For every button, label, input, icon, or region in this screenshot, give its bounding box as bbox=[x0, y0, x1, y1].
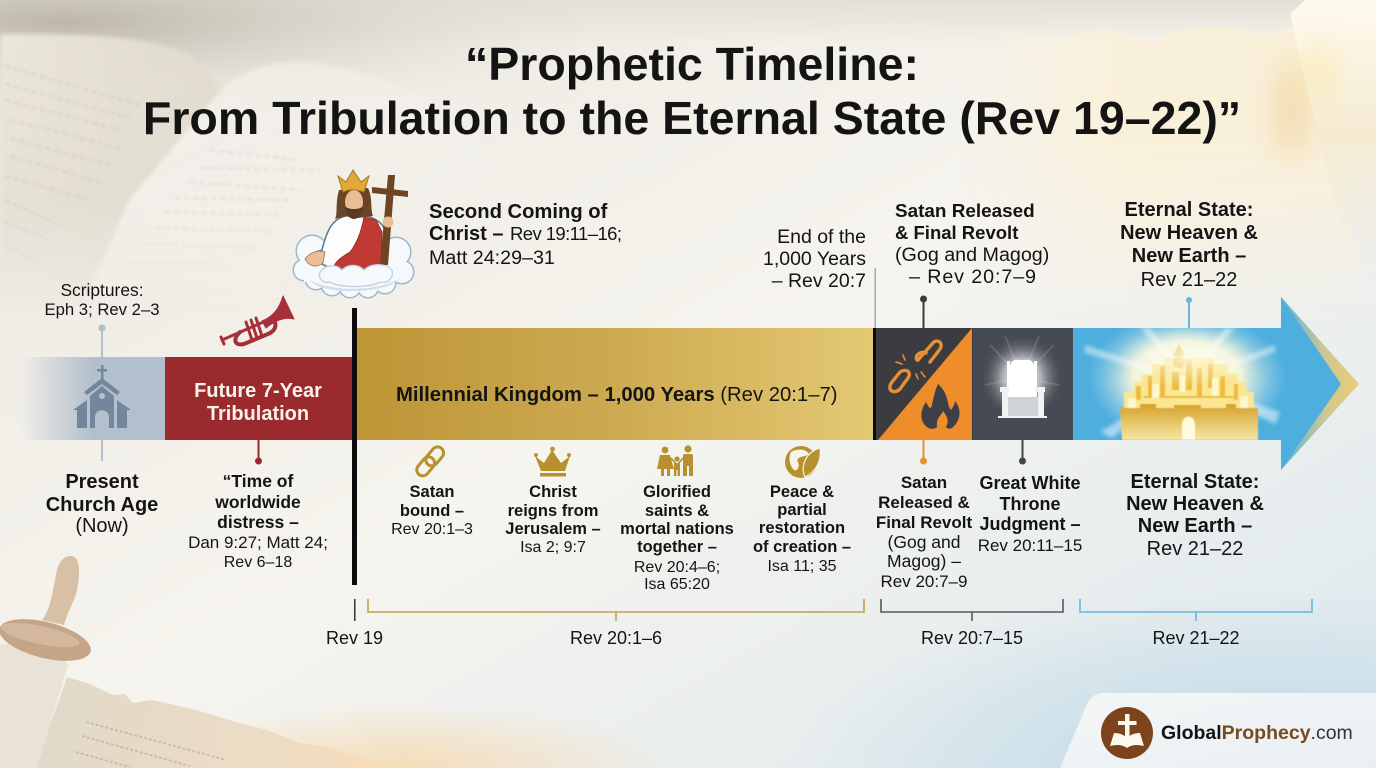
icon: golden city bbox=[1117, 328, 1258, 440]
label: Satan released bottom: Rev 20:7–9 bbox=[881, 572, 967, 591]
icon: Christ on a cloud bbox=[294, 170, 413, 297]
item: glorified saints: together – bbox=[637, 538, 717, 556]
connector: Satan released bottom bbox=[920, 440, 927, 464]
cross bbox=[380, 175, 395, 265]
label: present church age bbox=[46, 471, 158, 537]
item: glorified saints: Isa 65:20 bbox=[644, 576, 710, 593]
label: great white throne: Rev 20:11–15 bbox=[978, 536, 1082, 555]
item: Satan bound: bound – bbox=[400, 502, 464, 520]
label: Satan released bottom: Satan bbox=[901, 473, 947, 492]
label: Satan released bottom: Final Revolt bbox=[876, 513, 973, 532]
connector: church top bbox=[98, 324, 106, 357]
label: eternal state bottom: New Earth – bbox=[1138, 515, 1252, 537]
label: great white throne: Judgment – bbox=[979, 514, 1081, 534]
label: great white throne: Great White bbox=[979, 473, 1081, 493]
item: glorified saints: mortal nations bbox=[620, 520, 734, 538]
icon: cross and open book bbox=[1101, 707, 1153, 759]
label: eternal state bottom bbox=[1126, 471, 1264, 560]
item: peace and restoration: of creation – bbox=[753, 538, 851, 556]
label: present church age: (Now) bbox=[75, 515, 129, 537]
item: Christ reigns: Jerusalem – bbox=[505, 520, 601, 538]
item: Christ reigns bbox=[505, 447, 601, 556]
connector: church bottom bbox=[101, 440, 103, 461]
hair and head bbox=[335, 188, 373, 219]
title: “Prophetic Timeline: bbox=[465, 38, 919, 90]
item: Satan bound: Satan bbox=[410, 483, 454, 501]
label: end of the 1,000 years: End of the bbox=[777, 226, 866, 248]
crown bbox=[338, 170, 369, 192]
label: second coming: Matt 24:29–31 bbox=[429, 247, 555, 269]
robe bbox=[316, 216, 385, 270]
reference bracket: Rev 20:7-15: Rev 20:7–15 bbox=[921, 628, 1023, 648]
label: second coming: Rev 19:11–16; bbox=[510, 223, 622, 244]
hand bbox=[305, 251, 325, 266]
label: tribulation detail bbox=[188, 471, 328, 571]
timeline segment: great white throne bbox=[973, 328, 1073, 440]
label: present church age: Church Age bbox=[46, 494, 158, 516]
connector: eternal state bbox=[1186, 297, 1192, 328]
wordmark: GlobalProphecy.com bbox=[1161, 722, 1353, 744]
item: glorified saints: saints & bbox=[645, 502, 709, 520]
label: eternal state bottom: Rev 21–22 bbox=[1147, 538, 1243, 560]
reference bracket: Rev 19: Rev 19 bbox=[326, 628, 383, 648]
icon: trumpet bbox=[221, 296, 294, 344]
label: end of the 1,000 years: – Rev 20:7 bbox=[772, 270, 866, 292]
reference bracket: Rev 21-22 bbox=[1080, 599, 1312, 648]
label: scriptures bbox=[44, 280, 160, 319]
connector: end of the years bbox=[874, 268, 876, 328]
light rays bbox=[1085, 328, 1280, 438]
label: tribulation detail: distress – bbox=[217, 512, 299, 532]
item: Christ reigns: Christ bbox=[529, 483, 577, 501]
icon: family bbox=[657, 445, 693, 476]
label: great white throne: Throne bbox=[1000, 494, 1060, 514]
reference bracket: Rev 20:1-6 bbox=[368, 599, 864, 648]
label: Satan released top: – Rev 20:7–9 bbox=[909, 266, 1036, 288]
label: eternal state top bbox=[1120, 199, 1258, 291]
item: peace and restoration bbox=[753, 446, 851, 575]
sash bbox=[333, 217, 382, 272]
timeline segment: millennial kingdom bbox=[357, 328, 873, 440]
label: eternal state bottom: New Heaven & bbox=[1126, 493, 1264, 515]
item: Christ reigns: reigns from bbox=[508, 502, 598, 520]
item: glorified saints bbox=[620, 445, 734, 593]
label: end of the 1,000 years: 1,000 Years bbox=[763, 248, 866, 270]
label: scriptures: Scriptures: bbox=[60, 280, 144, 300]
icon: throne bbox=[998, 360, 1047, 418]
timeline segment: present church age bbox=[20, 357, 165, 440]
timeline marker: end of millennium bbox=[873, 328, 876, 440]
label: eternal state top: Eternal State: bbox=[1125, 199, 1253, 221]
label: Satan released top: Satan Released bbox=[895, 201, 1035, 222]
timeline segment: millennial kingdom: Millennial Kingdom – 1,000 Years (Rev 20:1–7) bbox=[396, 384, 838, 406]
timeline segment: Satan released bbox=[876, 328, 973, 440]
label: Satan released top: & Final Revolt bbox=[895, 222, 1018, 243]
connector: Satan released top bbox=[920, 296, 927, 328]
label: tribulation detail: Rev 6–18 bbox=[224, 554, 292, 571]
label: Satan released top: (Gog and Magog) bbox=[895, 244, 1049, 266]
label: second coming: Second Coming of bbox=[429, 201, 608, 223]
reference bracket: Rev 19 bbox=[326, 599, 383, 648]
label: eternal state top: New Earth – bbox=[1132, 245, 1246, 267]
label: tribulation detail: Dan 9:27; Matt 24; bbox=[188, 533, 328, 552]
item: Satan bound bbox=[391, 444, 473, 538]
item: Christ reigns: Isa 2; 9:7 bbox=[520, 539, 586, 556]
icon: crown bbox=[534, 447, 571, 476]
second coming marker line bbox=[352, 308, 357, 585]
background: torn scroll at lower left bbox=[0, 556, 393, 768]
label: eternal state top: New Heaven & bbox=[1120, 222, 1258, 244]
item: glorified saints: Glorified bbox=[643, 483, 711, 501]
arrow chevron bbox=[1281, 297, 1359, 470]
cloud back bbox=[294, 236, 413, 297]
connector: tribulation bbox=[255, 440, 262, 464]
connector: throne bbox=[1019, 440, 1026, 464]
label: Satan released top bbox=[895, 201, 1049, 288]
timeline segment: tribulation bbox=[165, 357, 352, 440]
label: tribulation detail: “Time of bbox=[223, 471, 293, 491]
icon: flame bbox=[921, 384, 960, 429]
timeline segment: tribulation: Future 7-Year bbox=[194, 380, 322, 402]
icon: chain link bbox=[414, 444, 446, 478]
item: Satan bound: Rev 20:1–3 bbox=[391, 521, 473, 538]
reference bracket: Rev 20:7-15 bbox=[881, 599, 1063, 648]
label: Satan released bottom: (Gog and bbox=[888, 532, 960, 552]
label: second coming bbox=[429, 201, 622, 269]
label: end of the 1,000 years bbox=[763, 226, 866, 292]
item: peace and restoration: Peace & bbox=[770, 483, 834, 501]
item: glorified saints: Rev 20:4–6; bbox=[634, 559, 720, 576]
label: tribulation detail: worldwide bbox=[214, 492, 301, 512]
timeline segment: eternal state arrow bbox=[1073, 297, 1359, 470]
timeline segment: tribulation: Tribulation bbox=[207, 403, 309, 425]
reference bracket: Rev 21-22: Rev 21–22 bbox=[1152, 628, 1240, 648]
label: Satan released bottom: Magog) – bbox=[887, 551, 961, 571]
item: peace and restoration: partial bbox=[777, 501, 827, 519]
label: great white throne bbox=[978, 473, 1082, 555]
cloud front bbox=[319, 265, 392, 286]
title: From Tribulation to the Eternal State (Rev 19–22)” bbox=[143, 92, 1241, 144]
icon: broken chain bbox=[890, 341, 941, 392]
icon: globe and leaf bbox=[785, 446, 820, 478]
reference bracket: Rev 20:1-6: Rev 20:1–6 bbox=[570, 628, 662, 648]
label: eternal state bottom: Eternal State: bbox=[1131, 471, 1259, 493]
label: Satan released bottom: Released & bbox=[878, 493, 970, 512]
label: second coming: Christ – bbox=[429, 223, 503, 245]
logo panel bbox=[1060, 693, 1376, 768]
item: peace and restoration: restoration bbox=[759, 519, 845, 537]
icon: church bbox=[73, 365, 131, 428]
label: scriptures: Eph 3; Rev 2–3 bbox=[44, 300, 160, 319]
label: present church age: Present bbox=[65, 471, 139, 493]
item: peace and restoration: Isa 11; 35 bbox=[767, 558, 837, 575]
label: eternal state top: Rev 21–22 bbox=[1141, 269, 1237, 291]
label: Satan released bottom bbox=[876, 473, 973, 591]
title bbox=[143, 38, 1241, 144]
